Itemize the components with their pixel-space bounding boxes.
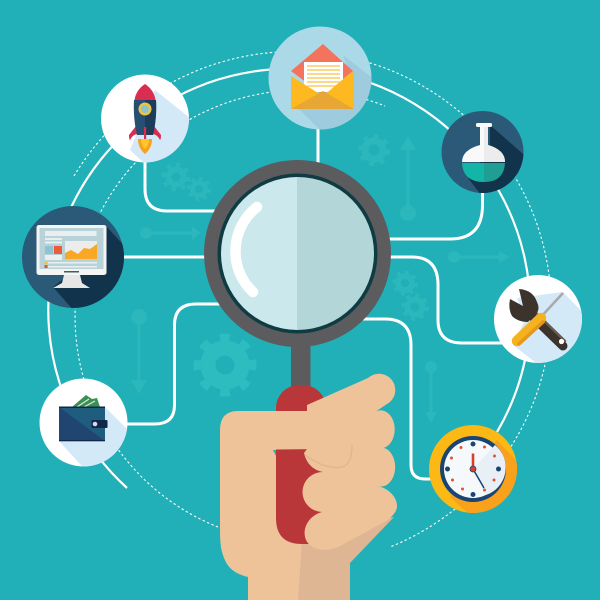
icon: clock bbox=[429, 425, 517, 513]
wrist shadow bbox=[298, 517, 394, 600]
icon: monitor bbox=[22, 206, 130, 312]
icon: rocket bbox=[101, 74, 189, 162]
orbit rings bbox=[48, 52, 551, 547]
icon: tools bbox=[494, 275, 582, 363]
magnifier frame bbox=[204, 160, 391, 347]
icon: flask bbox=[442, 111, 524, 193]
icon: wallet bbox=[40, 378, 128, 466]
inner dark ring bbox=[218, 174, 378, 334]
palm and wrist bbox=[220, 411, 312, 600]
handle shaft bbox=[291, 340, 310, 400]
lens bbox=[220, 177, 378, 331]
fingers bbox=[302, 374, 397, 550]
magnifying glass bbox=[204, 160, 391, 435]
connector lines bbox=[122, 125, 503, 479]
icon: envelope bbox=[268, 26, 375, 135]
red handle cap bbox=[276, 385, 326, 435]
hand holding the magnifier bbox=[220, 374, 397, 600]
thumb crease bbox=[305, 445, 352, 468]
faint background gears and arrows bbox=[131, 136, 510, 423]
lens highlight bbox=[235, 207, 257, 292]
teal gap beside grip bbox=[273, 450, 276, 456]
red handle grip bbox=[276, 449, 325, 544]
